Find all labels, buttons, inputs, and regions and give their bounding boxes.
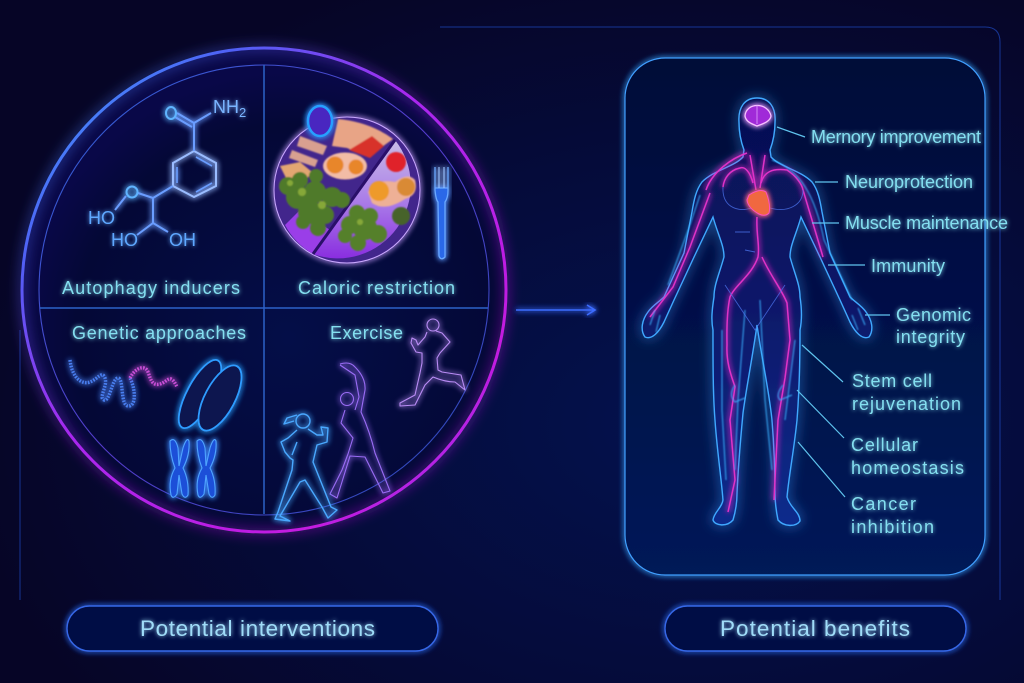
icon: food plate <box>274 106 420 263</box>
benefit: immunity <box>828 256 945 276</box>
greens right <box>338 205 387 251</box>
benefit: cellular homeostasis: homeostasis <box>851 458 964 478</box>
pill: potential interventions: Potential interventions <box>140 616 375 641</box>
chest and abdomen lines <box>723 187 803 330</box>
pill: potential benefits: Potential benefits <box>720 616 910 641</box>
benefit: neuroprotection: Neuroprotection <box>845 172 973 192</box>
benefit: cancer inhibition <box>798 442 934 537</box>
icon: walking woman <box>275 414 337 521</box>
body silhouette <box>642 98 872 525</box>
molecule labels: HO <box>88 208 115 228</box>
label: genetic approaches: Genetic approaches <box>72 323 246 343</box>
tomato <box>386 152 406 172</box>
molecule labels: NH <box>213 97 239 117</box>
benefit: stem cell rejuvenation: Stem cell <box>852 371 932 391</box>
benefit: genomic integrity <box>865 305 971 347</box>
label: caloric restriction: Caloric restriction <box>298 278 455 298</box>
eggs right <box>368 176 416 207</box>
panel: potential benefits <box>625 58 1008 575</box>
veins blue <box>650 160 865 480</box>
arrow: interventions to benefits <box>516 305 595 315</box>
meat slices <box>297 136 327 155</box>
icon: DNA strand blue <box>70 360 134 406</box>
pill: potential interventions <box>67 606 438 651</box>
benefit: cancer inhibition: inhibition <box>851 517 934 537</box>
pizza slice <box>332 119 393 157</box>
pill: potential benefits <box>665 606 966 651</box>
icon: autophagy molecule <box>115 107 216 235</box>
quadrant dividers <box>40 65 488 514</box>
benefit: immunity: Immunity <box>871 256 945 276</box>
icon: ribosome <box>171 354 250 437</box>
greens left <box>279 169 350 236</box>
panel: potential interventions circle <box>22 48 506 532</box>
molecule labels: OH <box>169 230 196 250</box>
bowl <box>308 106 332 136</box>
inner ring <box>39 65 489 515</box>
benefit: cellular homeostasis: Cellular <box>851 435 918 455</box>
outer glowing ring <box>22 48 506 532</box>
benefit: memory improvement: Mernory improvement <box>811 127 981 147</box>
benefit: cellular homeostasis <box>797 390 964 478</box>
benefit: genomic integrity: integrity <box>896 327 965 347</box>
veins magenta <box>650 153 823 512</box>
human body figure <box>642 98 872 525</box>
icon: chromosomes <box>170 440 216 497</box>
molecule labels: HO <box>111 230 138 250</box>
benefit: muscle maintenance: Muscle maintenance <box>845 213 1008 233</box>
label: exercise: Exercise <box>330 323 403 343</box>
eggs left <box>323 152 367 180</box>
icon: fork <box>435 167 448 259</box>
icon: runner <box>400 319 465 406</box>
icon: stretching woman <box>330 363 390 498</box>
heart <box>747 191 770 215</box>
brain <box>745 105 771 126</box>
benefit: cancer inhibition: Cancer <box>851 494 916 514</box>
molecule labels <box>88 97 246 250</box>
label: autophagy inducers: Autophagy inducers <box>62 278 240 298</box>
benefit: genomic integrity: Genomic <box>896 305 971 325</box>
benefit: stem cell rejuvenation <box>802 345 961 414</box>
benefit: stem cell rejuvenation: rejuvenation <box>852 394 961 414</box>
molecule labels: 2 <box>239 105 246 120</box>
icon: DNA strand magenta <box>130 368 177 387</box>
